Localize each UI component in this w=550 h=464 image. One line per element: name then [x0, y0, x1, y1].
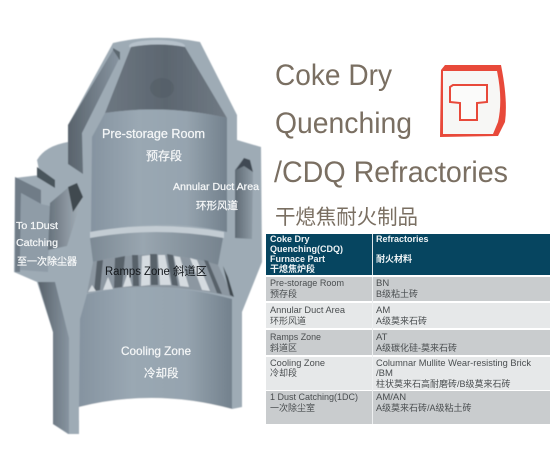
table: furnace parts and refractories: [266, 234, 550, 424]
row: ramps zone: 斜道区: [270, 342, 297, 353]
dark cone interior: [105, 44, 227, 118]
duct arch: [68, 183, 83, 212]
band above ramps: [90, 230, 223, 265]
right duct interior: [235, 158, 253, 239]
table header: Coke Dry: [270, 234, 310, 244]
row: cooling zone: [266, 357, 550, 390]
title: Coke Dry: [275, 59, 392, 92]
row: 1 dust catching: AM/AN: [376, 392, 406, 403]
label: cooling zone: 冷却段: [144, 366, 179, 380]
table header: 干熄焦炉段: [270, 263, 315, 274]
table header: Quenching(CDQ): [270, 244, 343, 254]
row: ramps zone: Ramps Zone: [270, 332, 321, 343]
dark smudge: [150, 78, 174, 98]
row: cooling zone: Columnar Mullite Wear-resisting Brick: [376, 358, 531, 369]
label: ramps zone: Ramps Zone 斜道区: [105, 264, 207, 278]
label: to 1 dust catching: To 1Dust: [16, 221, 58, 232]
pre-storage room inner face: [91, 109, 227, 234]
row: pre-storage room: B级粘土砖: [376, 288, 418, 299]
left flange ring: [37, 167, 55, 188]
left box top: [15, 177, 41, 272]
label: pre-storage room: [102, 127, 205, 163]
highlight ring: [90, 226, 224, 238]
white opening: [79, 398, 232, 420]
row: cooling zone: /BM: [376, 368, 393, 379]
row: 1 dust catching: [266, 391, 550, 424]
label: annular duct area: 环形风道: [196, 199, 238, 212]
ramps zone opening: [87, 255, 233, 297]
row: ramps zone: AT: [376, 332, 388, 343]
row: ramps zone: [266, 330, 550, 355]
row: ramps zone: A级碳化硅-莫来石砖: [376, 342, 457, 353]
title: 干熄焦耐火制品: [275, 206, 418, 229]
label: to 1 dust catching: 至一次除尘器: [17, 255, 77, 268]
row: annular duct area: Annular Duct Area: [270, 305, 346, 316]
table header: 耐火材料: [376, 253, 412, 264]
furnace wall section: [14, 38, 262, 434]
title: /CDQ Refractories: [274, 156, 508, 189]
label: to 1 dust catching: [16, 221, 77, 268]
row: pre-storage room: 预存段: [270, 288, 297, 299]
row: cooling zone: Cooling Zone: [270, 358, 325, 369]
notch at top left: [113, 48, 120, 60]
row: pre-storage room: Pre-storage Room: [270, 278, 344, 289]
funnel dark face: [38, 282, 69, 434]
label: cooling zone: [121, 344, 191, 380]
label: to 1 dust catching: Catching: [16, 238, 58, 249]
furnace cutaway illustration: [14, 38, 262, 434]
left exterior cone face: [68, 50, 119, 174]
table header: Furnace Part: [270, 254, 325, 264]
table header: Refractories: [376, 234, 429, 244]
row: pre-storage room: BN: [376, 278, 389, 289]
row: annular duct area: A级莫来石砖: [376, 315, 427, 326]
table header: [266, 234, 550, 275]
row: annular duct area: AM: [376, 305, 390, 316]
row: annular duct area: 环形风道: [270, 315, 306, 326]
top ring opening: [129, 40, 185, 52]
label: pre-storage room: Pre-storage Room: [102, 127, 205, 141]
cooling zone inner face: [79, 287, 232, 409]
dark ramp strips: [94, 254, 234, 297]
row: annular duct area: [266, 303, 550, 328]
title: Quenching: [275, 107, 412, 140]
row: cooling zone: 冷却段: [270, 367, 297, 378]
left box inner face: [20, 193, 50, 272]
left duct interior: [48, 186, 83, 250]
label: annular duct area: [173, 181, 259, 212]
label: cooling zone: Cooling Zone: [121, 344, 191, 358]
row: 1 dust catching: A级莫来石砖/A级粘土砖: [376, 402, 472, 413]
row: 1 dust catching: 一次除尘室: [270, 402, 315, 413]
row: pre-storage room: [266, 277, 550, 301]
row: cooling zone: 柱状莫来石高耐磨砖/B级莫来石砖: [376, 378, 511, 389]
right duct arch: [236, 158, 253, 172]
row: 1 dust catching: 1 Dust Catching(1DC): [270, 392, 358, 403]
icon: red T logo: [440, 65, 506, 137]
label: pre-storage room: 预存段: [146, 148, 182, 163]
light ramp slots and columns: [88, 255, 210, 292]
title: [274, 59, 508, 229]
label: annular duct area: Annular Duct Area: [173, 181, 259, 193]
